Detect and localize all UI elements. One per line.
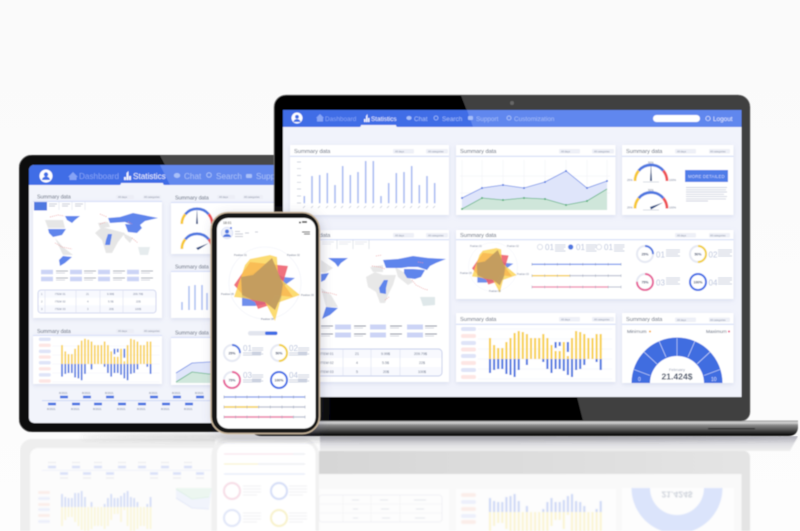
tablet timeline: 8/2021 [149, 391, 158, 395]
tablet nav: support: Support [256, 172, 285, 181]
laptop lid bezel [274, 95, 750, 421]
radar labels: Position 03 [517, 273, 529, 276]
tablet timeline: 8/2021 [59, 391, 68, 395]
donut 100%: 100% [694, 280, 703, 284]
green area [462, 189, 607, 210]
gauge 1: 50% [648, 160, 654, 164]
panel: radar and progress [460, 233, 732, 293]
tablet panel titles and lines: All days [118, 329, 128, 333]
reflected tablet rim [20, 439, 215, 531]
tablet nav: chat: Chat [184, 172, 202, 181]
tablet panels [33, 201, 281, 385]
phone radar labels: Position 01 [234, 253, 247, 257]
panel header lines [290, 156, 734, 324]
legend radio 1 [537, 243, 566, 252]
reflected tablet bars [62, 491, 151, 531]
heading: Summary data [294, 149, 331, 155]
data table: 9.99$ [381, 352, 390, 356]
tablet nav: chat [173, 172, 202, 180]
tablet timeline: 8/2021 [184, 407, 193, 411]
donut 25% [637, 246, 680, 262]
reflected gauge value: 21.424$ [661, 490, 693, 500]
tablet avatar icon [40, 170, 52, 182]
legend radio 2 [568, 243, 596, 252]
radar chart [469, 243, 517, 293]
gauge 1: 100% [669, 178, 677, 182]
donut 75%: 03 [243, 371, 252, 380]
laptop panel cards [290, 145, 734, 383]
panel: bar chart [294, 149, 448, 208]
gauge 2: 50% [648, 188, 654, 192]
map land grey [321, 260, 435, 307]
reflected laptop table [319, 495, 442, 522]
panel: gauges [626, 149, 730, 210]
reflected phone donut captions [243, 486, 307, 522]
tablet data table: 9.99$ [107, 292, 114, 296]
nav: customization: Customization [514, 116, 555, 123]
laptop [274, 95, 750, 421]
donut 75%: 75% [228, 378, 236, 382]
green line [461, 189, 607, 210]
radar labels: Position 01 [470, 245, 482, 248]
tablet data table: 3 [87, 307, 89, 311]
tablet data table: 100$ [135, 307, 142, 311]
reflected tablet screen [30, 448, 215, 531]
tablet bar chart [39, 337, 160, 383]
progress line pink [532, 286, 621, 288]
gauge 1: 25% [627, 178, 633, 182]
reflected phone donuts [224, 483, 287, 526]
gauge 2: 100% [669, 206, 677, 210]
filters: All categories [428, 233, 444, 237]
shadow under the devices [80, 434, 800, 440]
donut 75% [224, 371, 263, 388]
reflected phone screen [217, 443, 316, 531]
phone screen [217, 218, 316, 428]
tablet header bar [29, 165, 300, 185]
laptop base [250, 420, 798, 436]
search box [653, 115, 700, 122]
radar labels: Position 05 [460, 272, 472, 275]
tablet map tabs [34, 202, 85, 210]
reflected laptop base [320, 436, 798, 451]
tablet data table [38, 290, 156, 313]
filters [675, 233, 730, 238]
avatar icon [292, 112, 302, 124]
filters [675, 318, 730, 322]
reflected phone progress lines [224, 454, 305, 474]
nav: chat: Chat [414, 116, 428, 123]
phone [211, 212, 320, 434]
data table: ITEM 02 [320, 361, 334, 365]
laptop screen [283, 110, 742, 397]
gauge value: February [669, 367, 685, 372]
data table: 21 [355, 352, 359, 356]
panel: area chart [460, 149, 614, 210]
legend radio 1: 01 [545, 243, 554, 252]
x axis ticks [303, 206, 435, 208]
menu icon [302, 232, 310, 234]
filters: All days [677, 149, 687, 153]
legend radio 3 [596, 243, 624, 252]
tablet data table: 22$ [136, 300, 141, 304]
reflected phone body [212, 438, 319, 531]
reflected half donut [631, 488, 722, 531]
nav: support: Support [476, 116, 499, 123]
tablet small bar chart [182, 285, 207, 310]
data table: 4 [356, 361, 358, 365]
filters: All days [677, 233, 687, 237]
tablet data table: 1 [41, 292, 43, 296]
phone radar labels: Position 05 [221, 292, 234, 296]
data table: 22$ [419, 361, 425, 365]
phone body [211, 212, 320, 434]
filters [559, 149, 614, 154]
tablet panel titles and lines: Summary data [175, 196, 209, 202]
gauge value: 21.424$ [661, 372, 693, 382]
nav: chat [406, 116, 428, 123]
phone radar labels: Position 03 [301, 293, 314, 297]
nav: dashboard: Dashboard [325, 116, 357, 123]
donut 75%: 03 [656, 278, 665, 288]
tablet body [18, 154, 274, 433]
reflected tablet timeline [42, 462, 212, 478]
filters: All categories [710, 318, 726, 322]
tablet timeline: 8/2021 [47, 407, 56, 411]
nav: dashboard [316, 114, 357, 123]
tablet timeline: 8/2021 [195, 391, 204, 395]
phone radar labels: Position 02 [287, 253, 300, 257]
logout: Logout [713, 116, 733, 123]
donut 50%: 02 [289, 344, 298, 353]
tablet timeline: 8/2021 [105, 391, 114, 395]
reflection of the devices on the glossy surface [20, 436, 798, 531]
donut 100% [271, 371, 309, 388]
spokes [634, 338, 720, 376]
panel: stacked bar chart [460, 317, 614, 379]
donut 100%: 100% [275, 378, 284, 382]
reflected laptop bars yellow [490, 512, 601, 531]
minimum label: Minimum [627, 329, 646, 335]
gauge 2 [627, 188, 677, 210]
tablet data table: 3 [41, 307, 43, 311]
phone radar labels [221, 253, 314, 321]
reflected laptop pills [461, 493, 476, 524]
tablet mini chart chips [41, 271, 153, 280]
filters: All days [561, 317, 571, 321]
tablet panel titles and lines: All categories [144, 195, 160, 199]
panel: world map [294, 233, 448, 376]
tablet panel titles and lines: All days [118, 195, 128, 199]
map route dots [322, 255, 428, 300]
donut 25% [224, 344, 263, 361]
filters: All categories [710, 233, 726, 237]
filters: All days [561, 149, 571, 153]
phone radar labels: Position 04 [261, 317, 274, 321]
phone avatar [221, 227, 233, 239]
reflected laptop lid [319, 451, 750, 531]
donut 100%: 04 [708, 278, 718, 288]
donut 25%: 25% [228, 351, 236, 355]
reflected tablet pills [38, 491, 50, 523]
heading: Summary data [626, 317, 663, 323]
tablet data table: 4 [87, 300, 89, 304]
donut 100% [690, 274, 732, 290]
filters [393, 149, 448, 154]
heading: Summary data [460, 233, 497, 239]
grid [460, 160, 610, 210]
tablet [18, 154, 275, 433]
legend radio 3: 01 [604, 243, 613, 252]
webcam [510, 101, 514, 105]
maximum label: Maximum [706, 329, 727, 335]
legend radio 2: 01 [576, 243, 585, 252]
tablet timeline: 8/2021 [172, 391, 181, 395]
donut 50% [271, 344, 309, 361]
tablet nav: support [245, 172, 274, 181]
columns [304, 161, 435, 203]
data table: 20$ [383, 370, 389, 374]
progress line blue [532, 263, 621, 266]
devices group [19, 95, 800, 440]
tablet panel titles and lines: Summary data [175, 264, 209, 270]
donut 50%: 50% [694, 252, 702, 256]
donut 50% [690, 246, 732, 262]
donut 25%: 25% [641, 252, 649, 256]
blue line [461, 170, 608, 199]
blue area [462, 171, 607, 210]
map land blue [321, 256, 446, 319]
gauge 2: 25% [627, 206, 633, 210]
tablet data table: 209.79$ [133, 292, 144, 296]
tablet timeline: 8/2021 [137, 407, 146, 411]
legend pills [461, 327, 476, 379]
laptop trackpad notch [708, 428, 755, 429]
bars [478, 329, 612, 379]
tablet data table: ITEM 01 [55, 292, 66, 296]
nav: statistics: Statistics [371, 116, 397, 123]
tablet gauges [182, 209, 212, 250]
tablet screen [28, 164, 275, 424]
progress line yellow [532, 274, 621, 277]
data table [300, 349, 442, 376]
tablet timeline [42, 391, 215, 411]
panel: half-donut gauge [626, 317, 730, 383]
phone progress pink [224, 416, 305, 418]
donut 50%: 50% [275, 351, 283, 355]
phone progress yellow [224, 406, 305, 408]
laptop header bar [283, 110, 742, 127]
tablet timeline: 8/2021 [161, 407, 170, 411]
donut 75% [637, 274, 680, 290]
tablet panel titles and lines: Summary data [37, 194, 71, 200]
bezel gloss [461, 95, 750, 421]
filters: All days [395, 149, 405, 153]
button: MORE DETAILED [688, 174, 725, 179]
gauge ends [638, 377, 717, 383]
map tabs [322, 240, 369, 249]
tablet data table: 5.5$ [108, 300, 114, 304]
filters: All categories [594, 317, 610, 321]
user lines [235, 232, 258, 236]
tablet data table: 2 [41, 300, 43, 304]
tablet nav: dashboard: Dashboard [79, 172, 120, 181]
phone radar [229, 247, 301, 321]
tablet line chart [175, 361, 211, 384]
tablet panel titles and lines: Summary data [37, 329, 71, 335]
donut 100%: 04 [289, 371, 298, 380]
mini chart chips [321, 326, 437, 336]
data table: 5 [356, 370, 358, 374]
nav: search: Search [442, 116, 463, 123]
filters: All categories [428, 149, 444, 153]
donut 25%: 01 [656, 250, 665, 260]
data table: 209.79$ [414, 352, 427, 356]
tablet panel titles and lines: All days [219, 195, 229, 199]
gauge value [661, 367, 693, 382]
heading: Summary data [460, 317, 497, 323]
tablet panel titles and lines [33, 194, 281, 338]
data table: 100$ [418, 370, 426, 374]
tablet data table: 20$ [109, 307, 114, 311]
data table: ITEM 01 [320, 352, 334, 356]
filters: All categories [594, 149, 610, 153]
donut 50%: 02 [708, 250, 718, 260]
tablet data table: ITEM 02 [55, 300, 66, 304]
data table: ITEM 03 [320, 370, 334, 374]
reflected tablet area chart [176, 488, 212, 509]
filters [559, 317, 614, 322]
tablet nav: statistics: Statistics [133, 172, 166, 181]
donut 25%: 01 [243, 344, 252, 353]
reflected laptop bars blue [490, 494, 601, 512]
filters: All days [677, 318, 687, 322]
radar labels [460, 245, 529, 293]
filters [675, 149, 730, 154]
radar labels: Position 04 [489, 290, 501, 293]
tablet timeline: 8/2021 [71, 407, 80, 411]
tablet timeline: 8/2021 [82, 391, 91, 395]
status bar [223, 221, 307, 225]
tablet timeline: 8/2021 [93, 407, 102, 411]
tablet panel titles and lines: Summary data [175, 330, 209, 336]
filters: All categories [710, 149, 726, 153]
tablet panel titles and lines: All categories [144, 329, 160, 333]
data table: 5.5$ [382, 361, 389, 365]
donut 75%: 75% [641, 280, 649, 284]
radar labels: Position 02 [507, 245, 519, 248]
toggle [248, 331, 278, 336]
tablet data table: 21 [86, 292, 90, 296]
tablet nav: search: Search [216, 172, 242, 181]
reflected laptop screen [319, 474, 742, 531]
half donut [632, 338, 722, 383]
axis grid [297, 162, 301, 203]
filters [393, 233, 448, 238]
status bar: 18:01 [223, 221, 232, 225]
reflected laptop panels [319, 488, 734, 531]
gauge 1 [627, 160, 677, 182]
tablet world map [45, 213, 158, 266]
heading: Summary data [294, 233, 331, 239]
heading: Summary data [626, 149, 663, 155]
tablet data table: ITEM 03 [55, 307, 66, 311]
filters: All days [395, 233, 405, 237]
phone progress blue [224, 396, 305, 398]
gauge ends: 0 [638, 377, 641, 383]
tablet bezel gloss [160, 156, 300, 165]
tablet panel titles and lines: All categories [244, 195, 260, 199]
description text lines [686, 188, 727, 201]
tablet timeline: 8/2021 [117, 407, 126, 411]
heading: Summary data [460, 149, 497, 155]
gauge ends: 10 [711, 377, 717, 383]
nav: statistics [364, 114, 397, 123]
